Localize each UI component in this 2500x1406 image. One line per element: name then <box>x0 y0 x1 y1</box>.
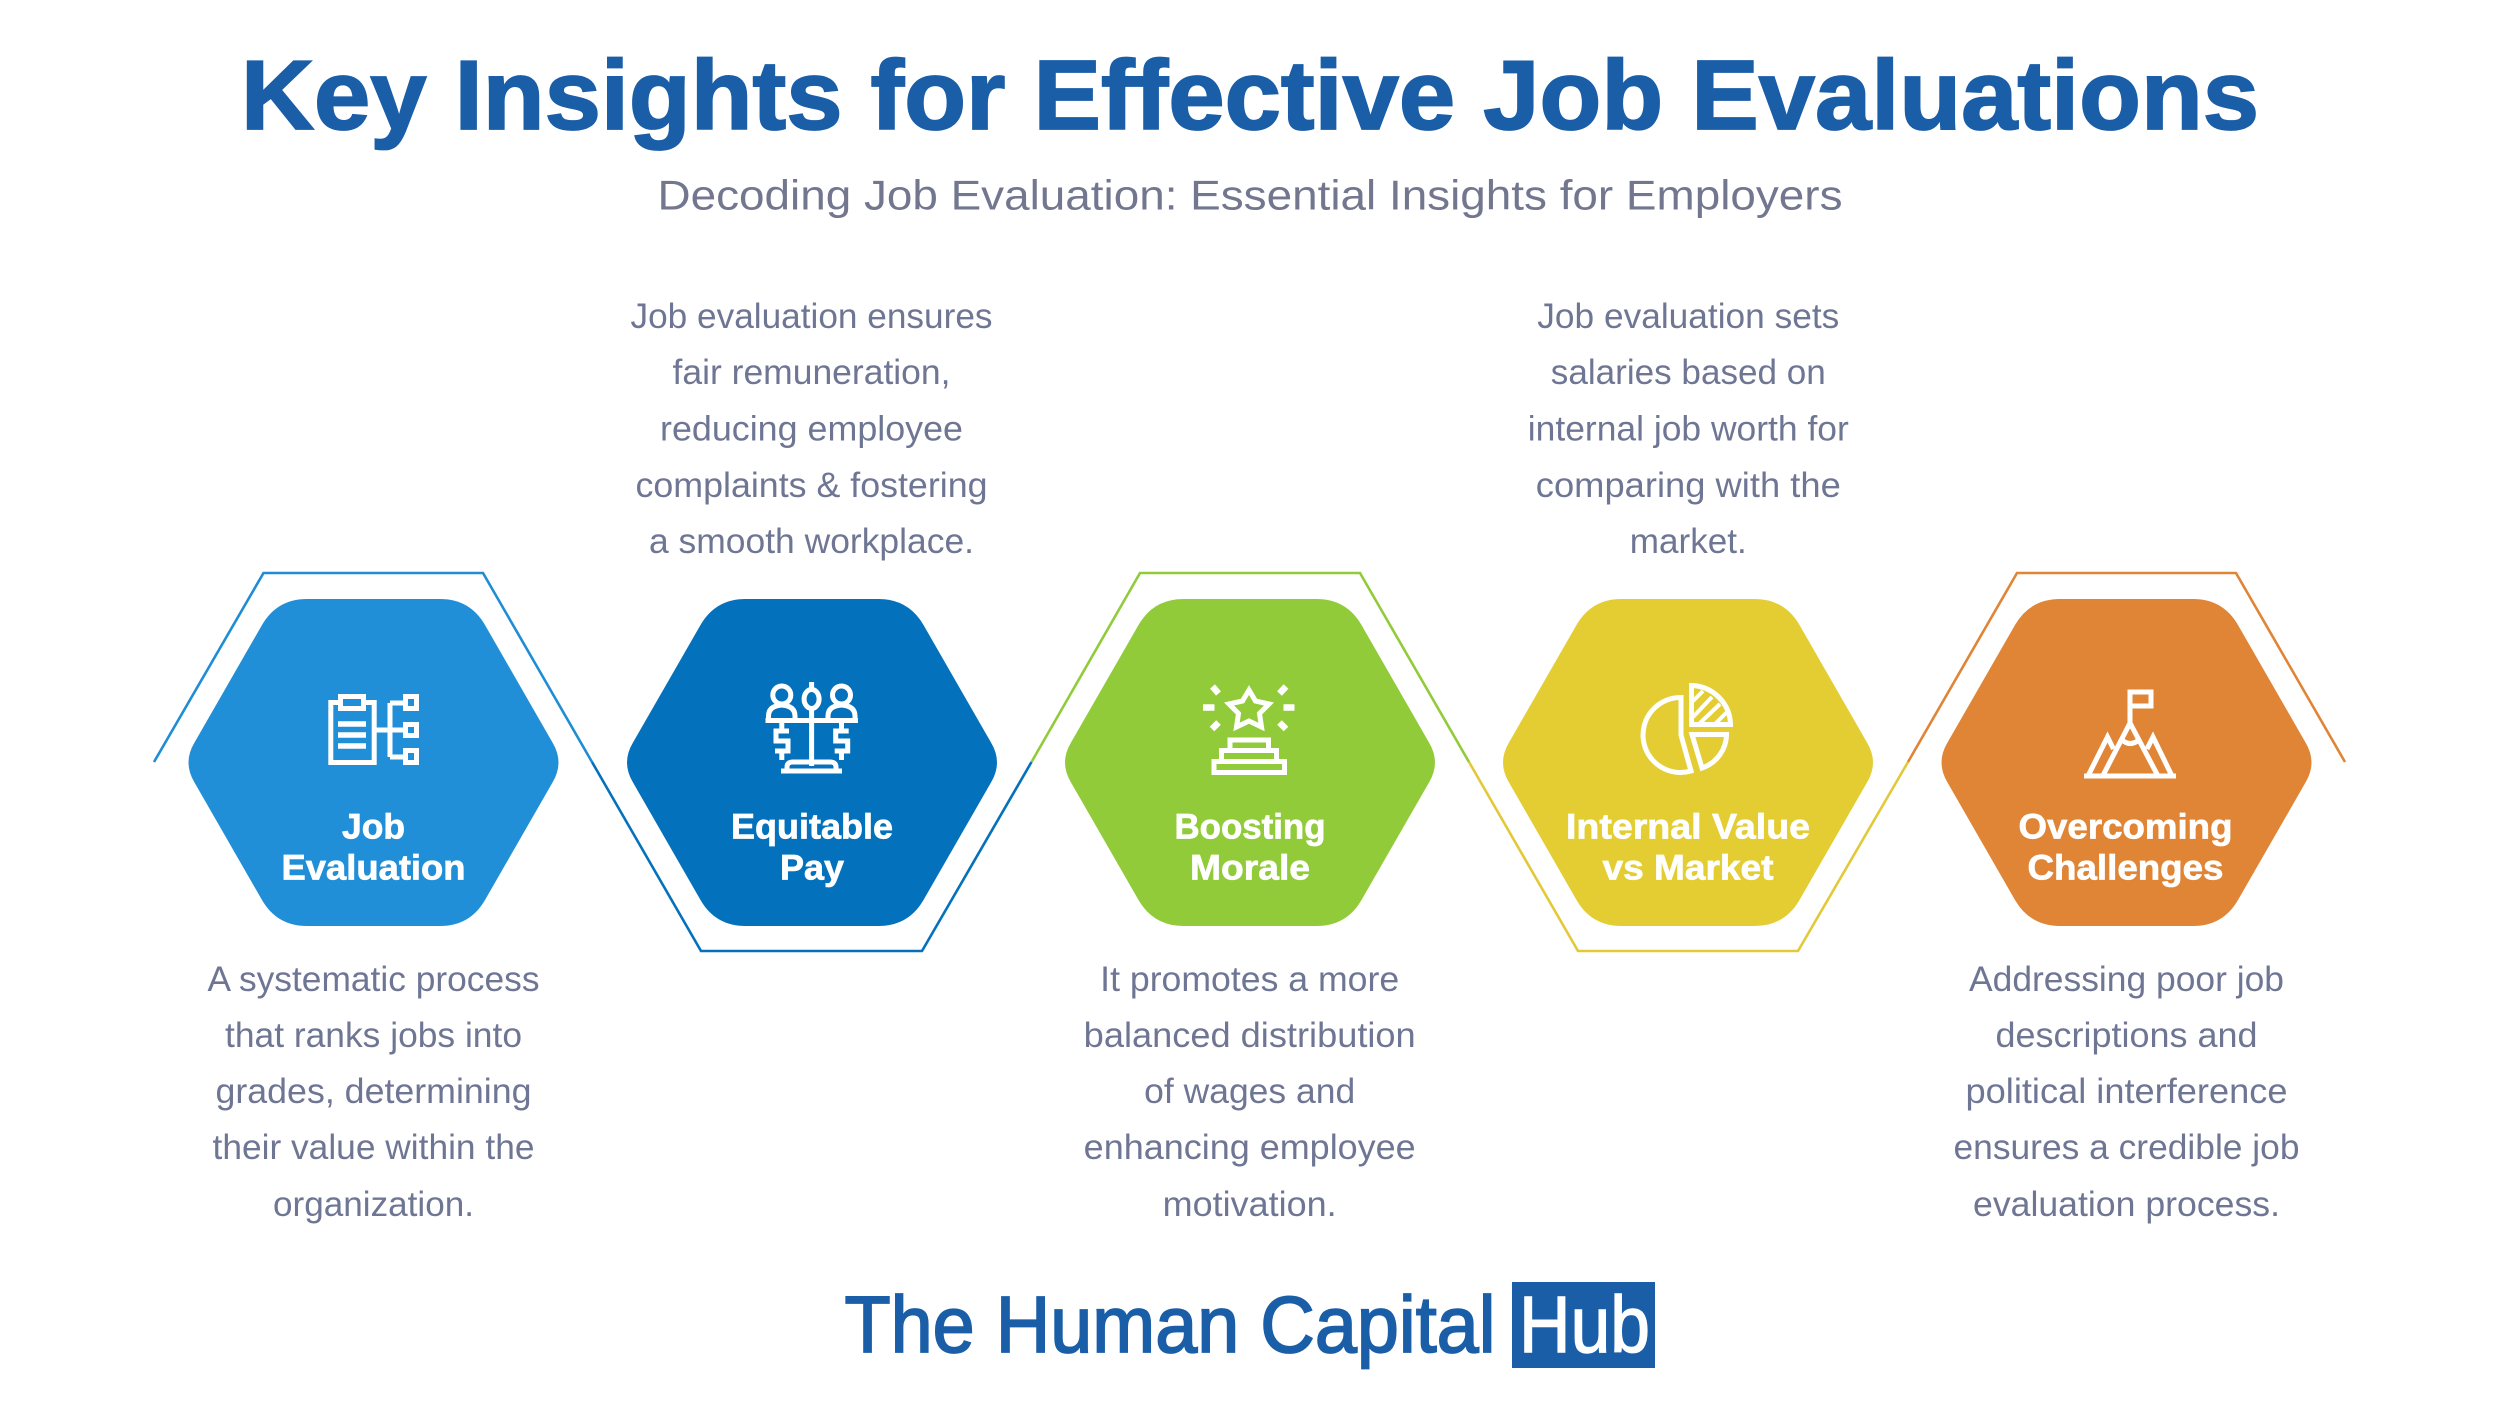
description: Job evaluation sets <box>1537 297 1839 336</box>
label <box>2018 808 2232 888</box>
hexagon <box>1065 599 1435 926</box>
logo: The Human Capital Hub: The Human Capital <box>844 1280 1496 1369</box>
label <box>1566 808 1810 888</box>
description: grades, determining <box>216 1072 532 1111</box>
label: Pay <box>780 848 845 888</box>
description: internal job worth for <box>1528 410 1849 448</box>
description: their value within the <box>212 1128 534 1167</box>
hexagon <box>627 599 997 926</box>
description: Job evaluation ensures <box>630 297 992 336</box>
description: motivation. <box>1163 1185 1337 1224</box>
icon: star on podium <box>1203 686 1294 772</box>
logo: The Human Capital Hub: Hub <box>1519 1280 1650 1369</box>
connecting hexagon outline <box>154 573 2345 951</box>
panel: job evaluation <box>188 599 558 1224</box>
description <box>1954 960 2300 1224</box>
label: Internal Value <box>1566 808 1810 846</box>
label <box>282 808 466 888</box>
description: comparing with the <box>1536 466 1841 505</box>
label: Equitable <box>731 808 893 846</box>
description <box>1084 960 1416 1224</box>
hexagon <box>188 599 558 926</box>
label: Overcoming <box>2018 808 2232 846</box>
subtitle: Decoding Job Evaluation: Essential Insights for Employers <box>658 172 1842 218</box>
description: of wages and <box>1144 1072 1355 1111</box>
hexagon <box>1942 599 2312 926</box>
panel: equitable pay <box>627 297 997 926</box>
hexagon <box>1503 599 1873 926</box>
description: market. <box>1630 522 1747 561</box>
description <box>630 297 992 561</box>
label: Job <box>342 808 405 846</box>
description: political interference <box>1966 1072 2288 1111</box>
description: balanced distribution <box>1084 1016 1416 1055</box>
label: Evaluation <box>282 848 466 888</box>
description: Addressing poor job <box>1969 960 2284 999</box>
label: Morale <box>1190 848 1310 888</box>
description: evaluation process. <box>1973 1185 2280 1224</box>
icon: clipboard with hierarchy <box>331 696 416 762</box>
icon: balance with people and dollars <box>766 682 858 771</box>
panel: boosting morale <box>1065 599 1435 1224</box>
description: that ranks jobs into <box>225 1016 522 1055</box>
description: a smooth workplace. <box>649 522 974 561</box>
description: fair remuneration, <box>672 353 950 392</box>
label: Challenges <box>2028 848 2224 888</box>
panel: internal value vs market <box>1503 297 1873 926</box>
label: Boosting <box>1174 808 1326 846</box>
description: It promotes a more <box>1100 960 1399 999</box>
title: Key Insights for Effective Job Evaluations <box>241 40 2259 150</box>
label <box>1174 808 1326 888</box>
description: organization. <box>273 1185 474 1224</box>
description: A systematic process <box>208 960 540 999</box>
description: descriptions and <box>1996 1016 2258 1055</box>
description: enhancing employee <box>1084 1128 1416 1167</box>
icon: mountain with flag <box>2084 692 2176 776</box>
description: salaries based on <box>1551 353 1826 392</box>
label: vs Market <box>1602 848 1774 888</box>
description: ensures a credible job <box>1954 1128 2300 1167</box>
panel: overcoming challenges <box>1942 599 2312 1224</box>
description: reducing employee <box>660 410 963 448</box>
description <box>1528 297 1849 561</box>
description <box>208 960 540 1224</box>
icon: pie chart <box>1643 686 1730 772</box>
label <box>731 808 893 888</box>
description: complaints & fostering <box>636 466 988 505</box>
